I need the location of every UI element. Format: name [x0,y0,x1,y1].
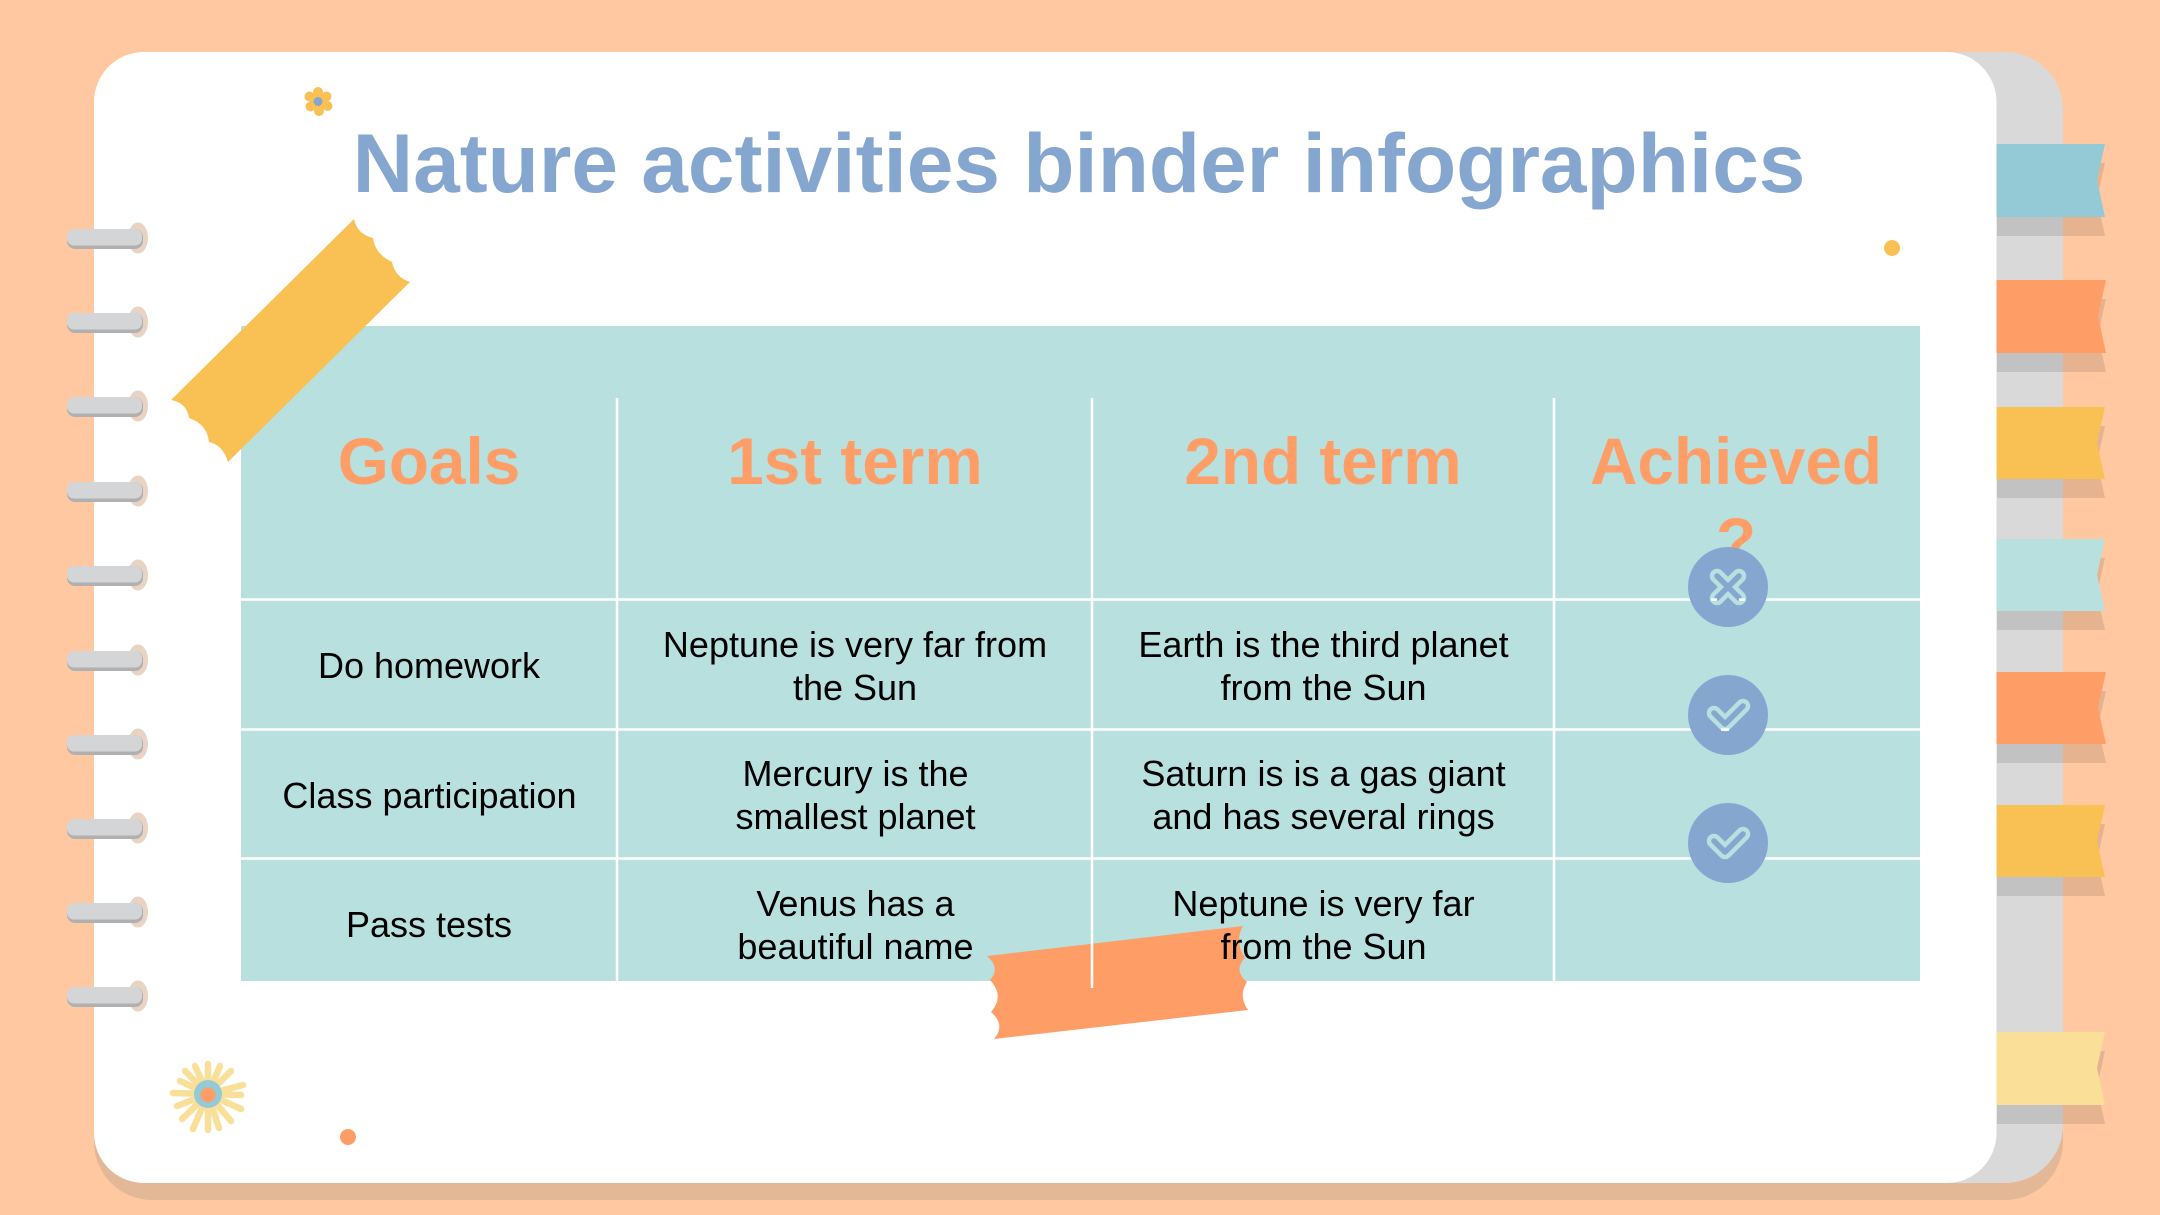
table row: Pass tests: beautiful name [737,926,974,967]
tab: orange [1996,280,2106,372]
tab: pale yellow [1996,1032,2105,1124]
decorative dot: orange [340,1129,356,1145]
table header row: 1st term [727,425,983,498]
title: Nature activities binder infographics [353,116,1805,210]
table row: Do homework [318,624,1509,708]
decorative dot: yellow [1884,240,1900,256]
table row: Do homework: the Sun [793,667,917,708]
tab: yellow [1996,407,2105,498]
icon: small flower [304,87,332,116]
table row: Class participation: and has several rings [1152,796,1495,837]
table row: Pass tests: from the Sun [1220,926,1427,967]
tab: mint [1996,539,2105,630]
table row: Pass tests [346,883,1475,967]
tab: orange lower [1996,672,2106,763]
table grid lines [241,398,1920,988]
table row: Pass tests: Neptune is very far [1172,883,1475,924]
table header row [338,425,1882,578]
tape: yellow [171,219,410,462]
tab: yellow lower [1996,805,2105,896]
spiral rings [67,222,148,1012]
table row: Pass tests: Venus has a [756,883,956,924]
table row: Class participation: smallest planet [735,796,976,837]
icon: cross badge [1688,547,1768,627]
table header row: Goals [338,425,520,498]
table row: Class participation: Class participation [282,775,577,816]
table row: Do homework: Neptune is very far from [663,624,1047,665]
table row: Class participation: Mercury is the [742,753,969,794]
icon: check badge [1688,803,1768,883]
tape: orange [987,926,1248,1039]
table row: Pass tests: Pass tests [346,904,512,945]
table header row: ? [1716,505,1756,578]
table row: Do homework: from the Sun [1220,667,1427,708]
table row: Do homework: Do homework [318,645,541,686]
table header row: 2nd term [1184,425,1462,498]
icon: sunburst flower [173,1064,243,1130]
table row: Do homework: Earth is the third planet [1138,624,1509,665]
table row: Class participation [282,753,1506,837]
table header row: Achieved [1590,425,1882,498]
table row: Class participation: Saturn is is a gas giant [1141,753,1506,794]
table background [241,326,1920,981]
tab: blue [1996,144,2105,236]
icon: check badge [1688,675,1768,755]
